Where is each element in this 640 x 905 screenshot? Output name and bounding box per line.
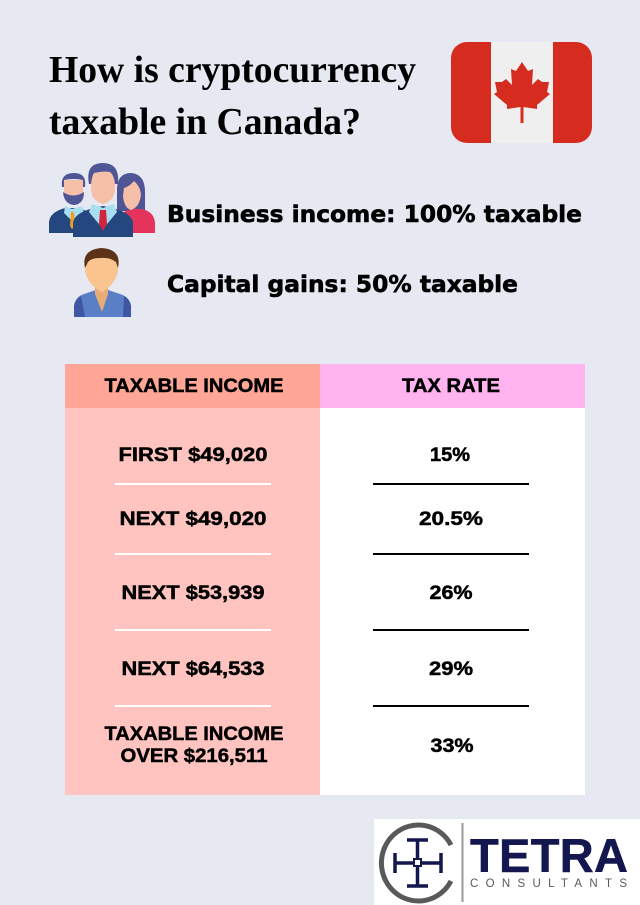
- row 4: [122, 658, 473, 680]
- row 4: NEXT $64,533: [122, 658, 265, 680]
- title: [49, 49, 416, 143]
- row 5: [104, 723, 474, 767]
- logo emblem: [381, 825, 451, 901]
- text: capital gains: Capital gains: 50% taxable: [167, 270, 518, 298]
- icon: person: [74, 248, 131, 317]
- bearded man: [49, 208, 92, 233]
- income column: [65, 408, 320, 795]
- title: taxable in Canada?: [49, 101, 361, 143]
- header: tax rate: [320, 364, 585, 408]
- row 2: NEXT $49,020: [120, 508, 267, 530]
- woman: [117, 173, 145, 211]
- logo subtitle: CONSULTANTS: [470, 878, 627, 890]
- tax table: [65, 364, 585, 795]
- header: taxable income: [65, 364, 320, 408]
- row 2: [120, 508, 483, 530]
- row 1: 15%: [430, 444, 470, 466]
- header: tax rate: TAX RATE: [402, 375, 500, 397]
- text: business income: Business income: 100% taxable: [167, 200, 582, 228]
- rate column: [320, 408, 585, 795]
- row 5: 33%: [430, 735, 474, 757]
- row 3: NEXT $53,939: [122, 582, 265, 604]
- row 3: 26%: [430, 582, 472, 604]
- row 4: 29%: [429, 658, 473, 680]
- centre man: [73, 206, 133, 237]
- icon: business people group: [49, 163, 155, 237]
- logo: Tetra Consultants: [374, 819, 640, 905]
- icon: Canadian flag: [451, 42, 592, 143]
- row 5: TAXABLE INCOME: [104, 723, 284, 745]
- icon: maple leaf: [494, 62, 550, 123]
- row 1: [118, 444, 470, 466]
- row 3: [122, 582, 472, 604]
- title: How is cryptocurrency: [49, 49, 416, 91]
- row 2: 20.5%: [419, 508, 483, 530]
- row 1: FIRST $49,020: [118, 444, 268, 466]
- header: taxable income: TAXABLE INCOME: [104, 375, 284, 397]
- logo wordmark: TETRA: [470, 829, 628, 882]
- row 5: OVER $216,511: [120, 745, 268, 767]
